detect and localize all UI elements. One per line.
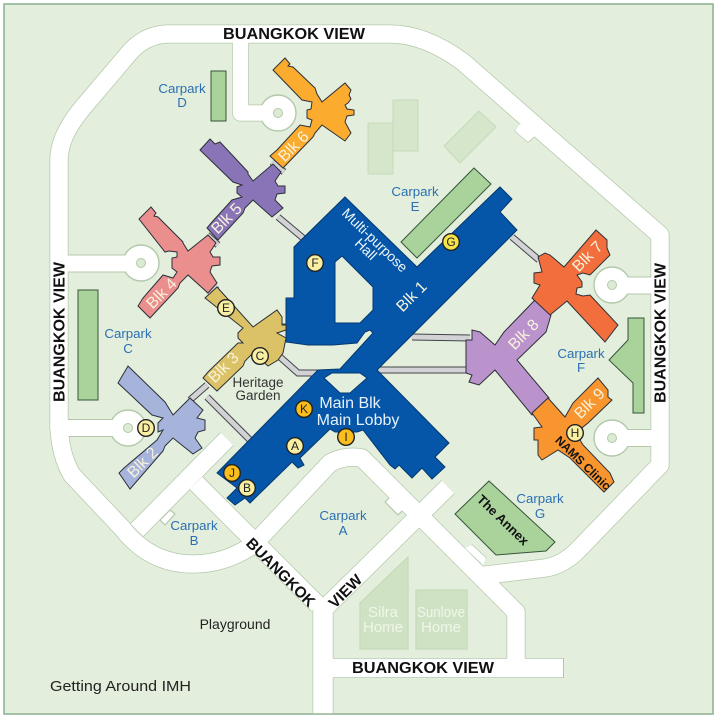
- location markers: F: [311, 256, 319, 270]
- location markers: D: [142, 421, 151, 435]
- carpark labels: F: [577, 360, 585, 375]
- carpark labels: Carpark: [158, 81, 206, 96]
- building: Blk 7: Blk 7: [569, 238, 607, 276]
- carpark labels: E: [411, 199, 420, 214]
- carpark labels: Carpark: [104, 326, 152, 341]
- homes: Silra and Sunlove: Silra: [368, 604, 399, 621]
- homes: Silra and Sunlove: [360, 557, 467, 649]
- label: Heritage Garden: Garden: [235, 388, 281, 403]
- label: Main Blk Main Lobby: Main Blk: [319, 395, 382, 412]
- building: Blk 6: Blk 6: [275, 128, 313, 166]
- location markers: I: [344, 430, 348, 444]
- faint unlabelled buildings: [368, 100, 496, 174]
- location markers: H: [571, 426, 579, 440]
- road labels: BUANGKOK VIEW: [652, 263, 670, 403]
- building: Blk 4: Blk 4: [143, 275, 181, 313]
- carpark labels: Carpark: [391, 184, 439, 199]
- label: Heritage Garden: [232, 375, 284, 403]
- location markers: E: [222, 301, 230, 315]
- label: Multi-purpose Hall: Multi-purpose: [339, 205, 411, 275]
- building: Blk 8: [466, 300, 551, 415]
- location markers: [138, 234, 583, 496]
- building: Blk 3: Blk 3: [205, 349, 243, 387]
- building: Blk 5: [200, 139, 285, 240]
- building: The Annex: [455, 481, 555, 555]
- carpark labels: [104, 81, 605, 548]
- road labels: [52, 26, 670, 677]
- road labels: BUANGKOK: [242, 535, 319, 611]
- label: Main Blk Main Lobby: [317, 395, 399, 429]
- building: Blk 2: [118, 366, 205, 489]
- label: Heritage Garden: Heritage: [232, 375, 284, 390]
- building: Blk 2: Blk 2: [124, 444, 162, 482]
- carpark labels: A: [339, 523, 348, 538]
- carpark labels: B: [190, 533, 199, 548]
- road labels: VIEW: [326, 571, 366, 612]
- carpark labels: Carpark: [516, 491, 564, 506]
- building: Blk 8: Blk 8: [505, 316, 543, 354]
- homes: Silra and Sunlove: Home: [363, 619, 403, 636]
- building: Blk 7: [532, 230, 618, 342]
- carpark labels: C: [123, 341, 133, 356]
- link corridors: [190, 162, 539, 440]
- label: Multi-purpose Hall: Hall: [352, 235, 380, 263]
- label: Blk 1: Blk 1: [393, 278, 431, 316]
- building: Blk 9: [532, 378, 614, 493]
- homes: Silra and Sunlove: Home: [421, 619, 461, 636]
- caption: Getting Around IMH: Getting Around IMH: [50, 678, 191, 695]
- carpark blocks: [78, 71, 644, 413]
- location markers: A: [291, 439, 299, 453]
- building: Blk 6: [270, 58, 354, 168]
- building: Blk 4: [138, 207, 220, 318]
- carpark labels: D: [177, 95, 187, 110]
- road labels: BUANGKOK VIEW: [352, 660, 494, 677]
- building: Blk 9: Blk 9: [571, 385, 609, 423]
- carpark labels: Carpark: [557, 346, 605, 361]
- location markers: B: [243, 481, 251, 495]
- carpark labels: G: [535, 506, 545, 521]
- building: Blk 1 and Main Blk: [217, 187, 517, 505]
- building: The Annex: The Annex: [474, 492, 532, 549]
- location markers: G: [446, 235, 456, 249]
- location markers: J: [229, 466, 235, 480]
- location markers: K: [300, 402, 308, 416]
- road network: [59, 34, 660, 714]
- location markers: C: [256, 349, 265, 363]
- building: Blk 9: NAMS Clinic: [552, 433, 614, 493]
- building: Blk 3: [203, 287, 286, 391]
- label: Main Blk Main Lobby: Main Lobby: [317, 412, 399, 429]
- road labels: BUANGKOK VIEW: [223, 26, 365, 43]
- carpark labels: Carpark: [319, 508, 367, 523]
- building: Blk 5: Blk 5: [208, 200, 246, 238]
- homes: Silra and Sunlove: Sunlove: [417, 604, 465, 621]
- label: Playground: Playground: [200, 616, 270, 632]
- road labels: BUANGKOK VIEW: [52, 262, 68, 402]
- carpark labels: Carpark: [170, 518, 218, 533]
